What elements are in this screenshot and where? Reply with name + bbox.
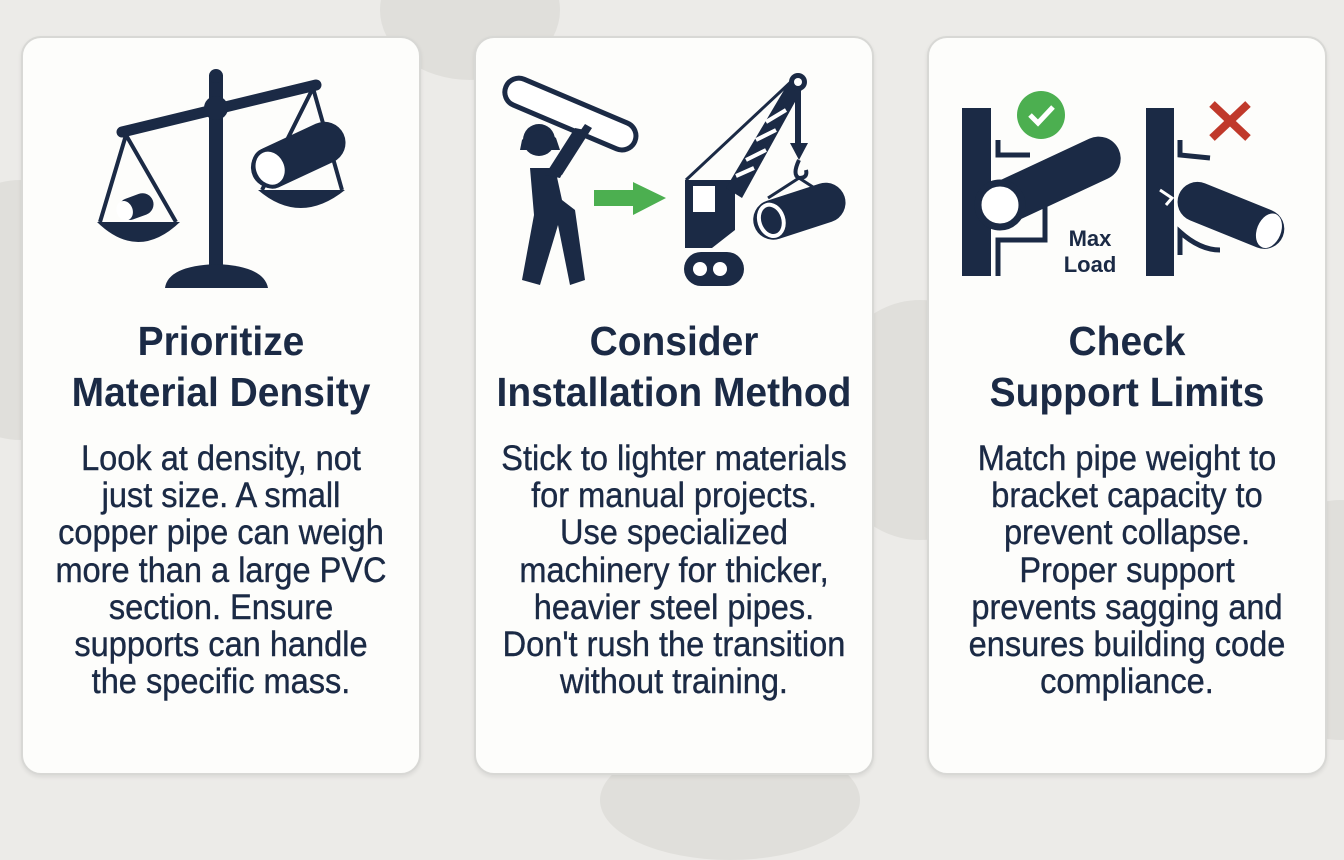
text: density description: supports can handle xyxy=(74,625,368,664)
text: support description: ensures building code xyxy=(969,625,1285,664)
icon: worker to crane xyxy=(500,73,851,286)
panel: support limits xyxy=(927,36,1327,775)
text: installation description: machinery for thicker, xyxy=(519,551,829,590)
heading: prioritize material density: Material Density xyxy=(72,369,370,415)
text: installation description xyxy=(501,439,847,701)
text: density description xyxy=(55,439,387,701)
heading: check support limits: Support Limits xyxy=(990,369,1264,415)
text: installation description: heavier steel pipes. xyxy=(534,588,814,627)
heading: prioritize material density: Prioritize xyxy=(138,318,304,364)
text: support description: prevent collapse. xyxy=(1004,513,1250,552)
heading: consider installation method: Consider xyxy=(590,318,758,364)
text: support description xyxy=(969,439,1285,701)
text: density description: section. Ensure xyxy=(109,588,333,627)
text: density description: Look at density, not xyxy=(81,439,361,478)
text: installation description: Don't rush the transition xyxy=(503,625,845,664)
icon: support bracket ok vs failed: Load xyxy=(1064,252,1116,277)
text: support description: bracket capacity to xyxy=(991,476,1263,515)
icon: support bracket ok vs failed: Max xyxy=(1069,226,1112,251)
icon: support bracket ok vs failed xyxy=(962,91,1290,277)
panel: installation method xyxy=(474,36,874,775)
text: support description: Match pipe weight to xyxy=(978,439,1276,478)
text: support description: Proper support xyxy=(1019,551,1235,590)
text: installation description: for manual projects. xyxy=(531,476,817,515)
text: installation description: Use specialized xyxy=(560,513,788,552)
text: density description: just size. A small xyxy=(102,476,340,515)
text: installation description: Stick to lighter materials xyxy=(501,439,847,478)
text: support description: compliance. xyxy=(1040,662,1214,701)
panel: material density xyxy=(21,36,421,775)
heading: consider installation method xyxy=(497,318,851,415)
icon: balance scale with pipes xyxy=(97,69,352,288)
text: density description: more than a large PVC xyxy=(55,551,387,590)
text: support description: prevents sagging and xyxy=(971,588,1283,627)
text: density description: the specific mass. xyxy=(92,662,350,701)
heading: check support limits xyxy=(990,318,1264,415)
text: installation description: without training. xyxy=(560,662,788,701)
heading: check support limits: Check xyxy=(1069,318,1185,364)
heading: prioritize material density xyxy=(72,318,370,415)
heading: consider installation method: Installation Method xyxy=(497,369,851,415)
text: density description: copper pipe can weigh xyxy=(58,513,384,552)
